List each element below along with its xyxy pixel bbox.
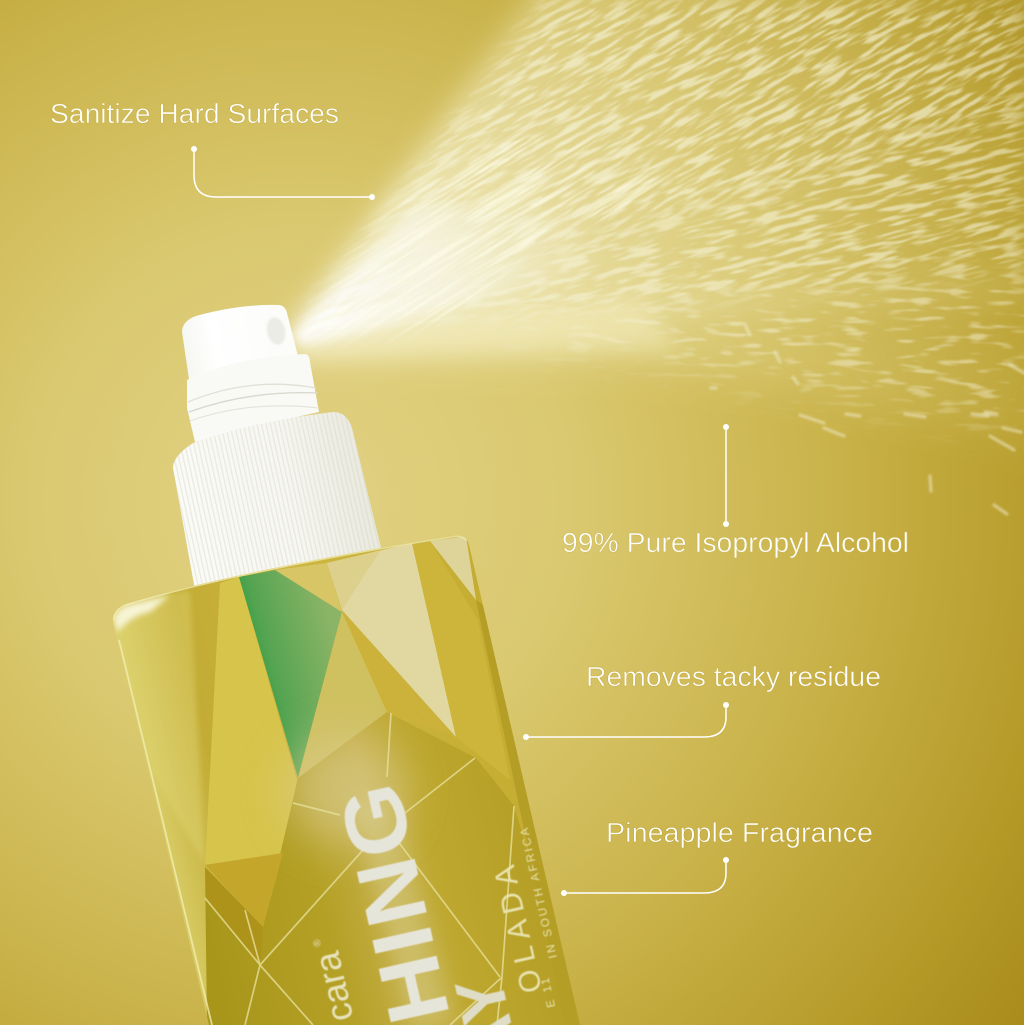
nozzle opening	[264, 315, 288, 347]
facet: left central	[205, 577, 297, 865]
leader line	[194, 149, 372, 197]
ribbed cap	[173, 412, 381, 586]
collar	[187, 354, 319, 442]
rim corner highlight	[114, 595, 170, 632]
leader line	[725, 427, 727, 524]
lower droplet streaks	[524, 236, 1024, 431]
label highlight column	[350, 800, 455, 1025]
spray bottle	[100, 305, 600, 1025]
facet: gold lower	[205, 853, 283, 927]
middle droplet streaks	[373, 94, 1024, 323]
fine long streaks near nozzle	[318, 112, 682, 337]
facet: left pale curve	[123, 590, 204, 858]
product name: OLADA	[487, 855, 549, 996]
facet: yellow	[298, 612, 387, 778]
callout: sanitize hard surfaces	[50, 98, 375, 200]
callout: removes tacky residue	[523, 661, 881, 740]
facet: gold	[342, 612, 387, 712]
upper droplet streaks	[310, 0, 1024, 325]
facet: right panels	[412, 541, 510, 780]
right edge band	[476, 600, 590, 1025]
left cream edge line	[119, 640, 212, 1025]
product name	[306, 772, 560, 1025]
product name: cara	[306, 947, 361, 1025]
heading: Pineapple Fragrance	[606, 817, 873, 848]
wireframe lines	[205, 713, 514, 1025]
heading: 99% Pure Isopropyl Alcohol	[562, 527, 909, 558]
actuator nozzle head	[182, 305, 298, 386]
product name: HING	[320, 772, 468, 1025]
callout: pineapple fragrance	[561, 817, 873, 896]
facet: upper cream triangle	[275, 563, 342, 612]
heading: Removes tacky residue	[586, 661, 881, 692]
bottle body	[100, 520, 600, 1025]
spray glow upper	[292, 0, 1024, 345]
heading: Sanitize Hard Surfaces	[50, 98, 339, 129]
stray droplets	[711, 325, 1024, 514]
facet: green	[239, 570, 342, 778]
leader line	[526, 705, 726, 737]
white core of the spray	[293, 205, 600, 345]
facet: dark lower	[205, 867, 263, 928]
rim highlight	[113, 536, 467, 620]
spray glow lower	[296, 280, 1024, 450]
facet: cream	[327, 543, 456, 737]
leader line	[564, 860, 726, 893]
pale light band under the nozzle	[295, 300, 680, 360]
label glow	[285, 735, 405, 845]
product name: E 11	[539, 974, 558, 1009]
spray mist	[284, 0, 1024, 516]
product name: ®	[311, 938, 324, 948]
callout: pure isopropyl alcohol	[562, 424, 909, 558]
label panel	[205, 712, 580, 1025]
product name: IN SOUTH AFRICA	[518, 824, 560, 959]
